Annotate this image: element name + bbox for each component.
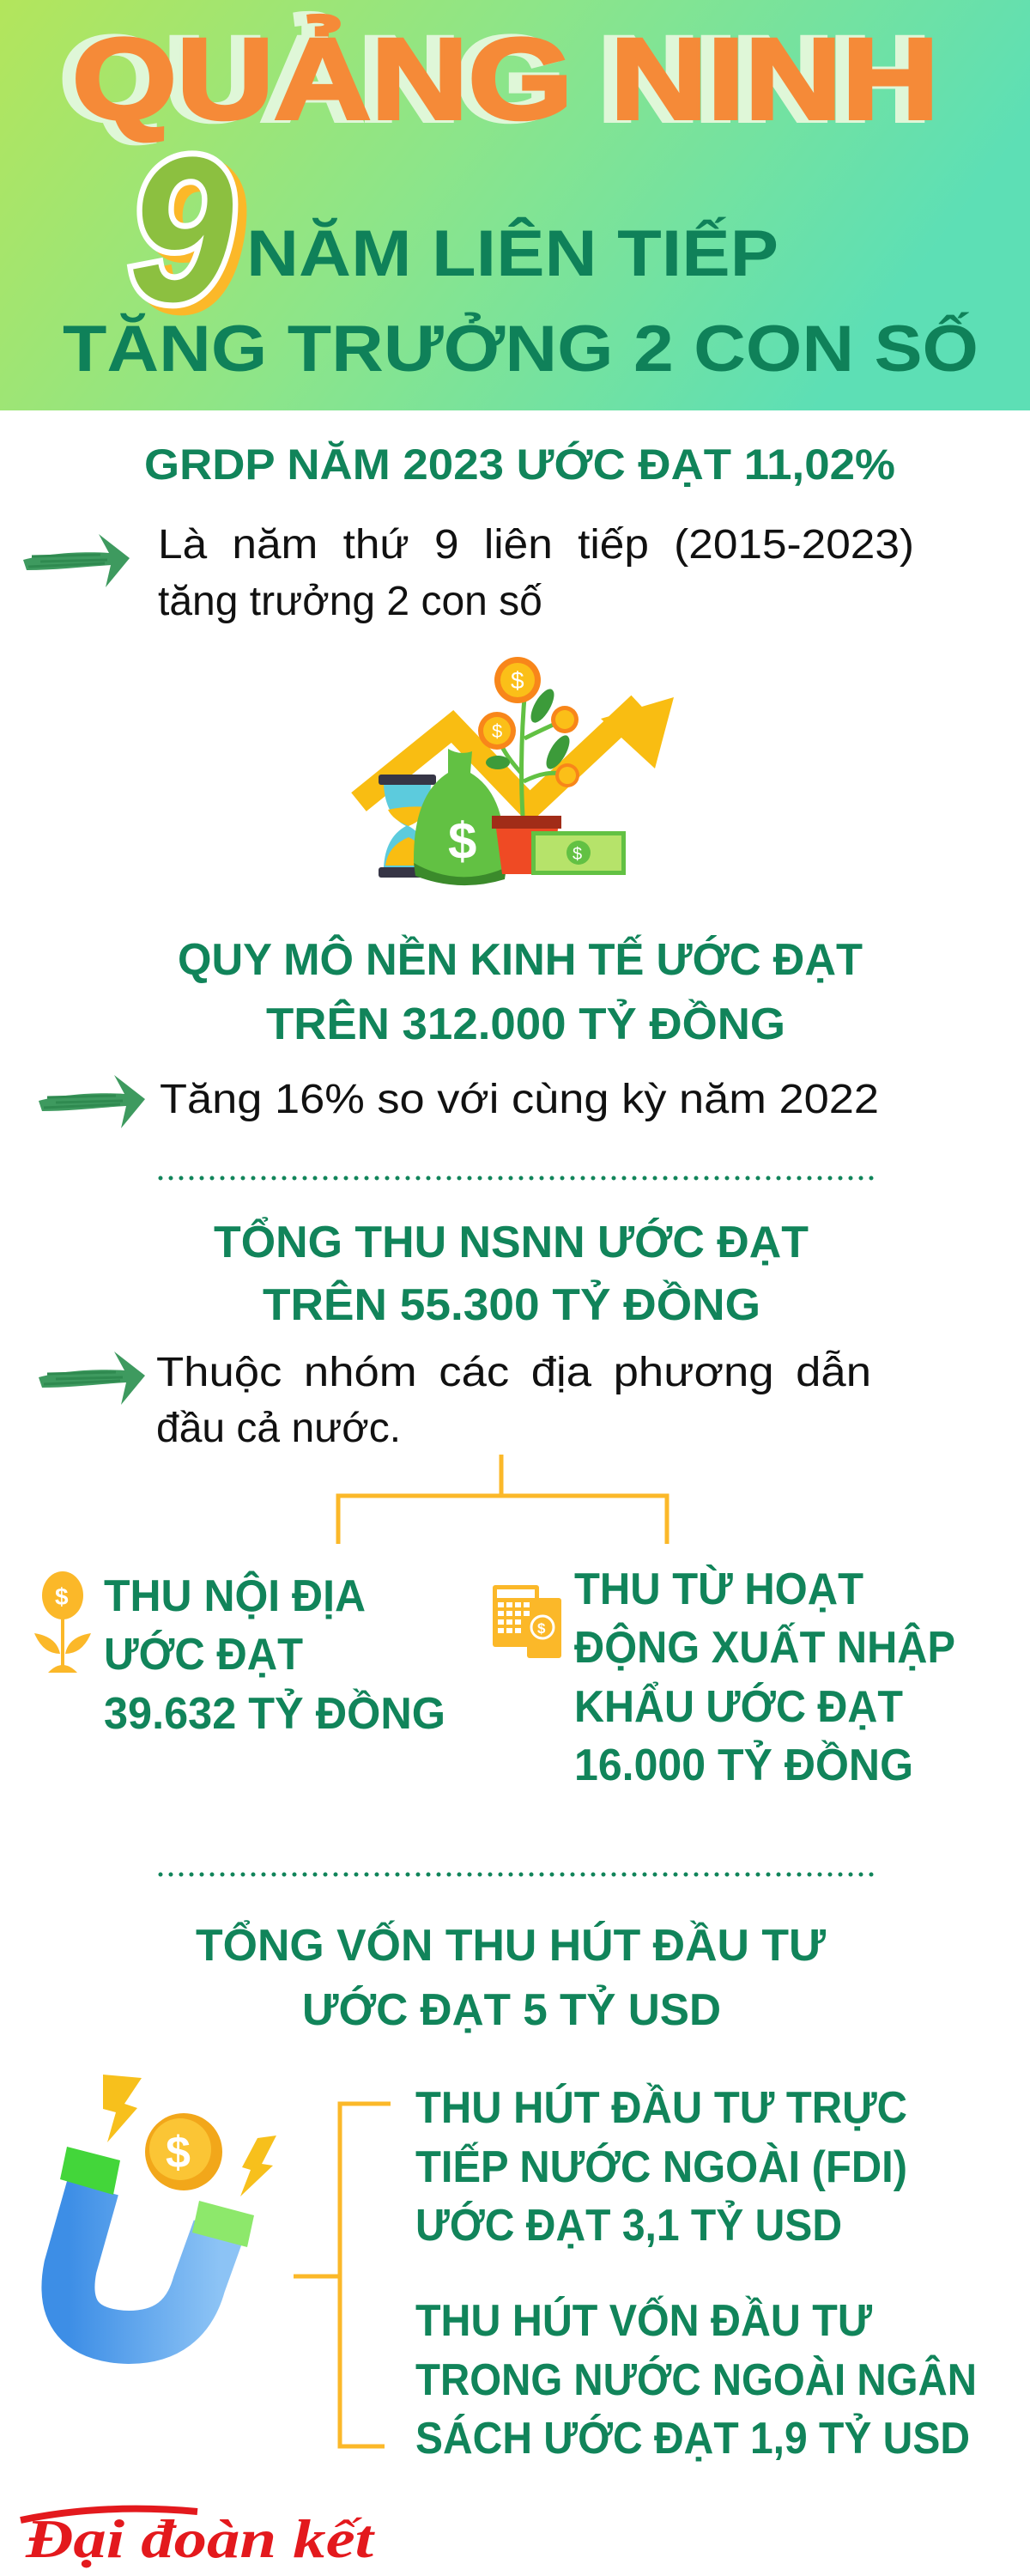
heading: NSNN: TỔNG THU NSNN ƯỚC ĐẠT <box>214 1217 809 1267</box>
plant <box>498 687 566 816</box>
illustration: growth <box>359 657 674 885</box>
logo: Đại đoàn kết: Đại đoàn kết <box>25 2508 376 2569</box>
icon: calculator: $ <box>537 1620 546 1637</box>
text: body 1: Là năm thứ 9 liên tiếp (2015-2023) <box>158 522 914 568</box>
text: body 2: Tăng 16% so với cùng kỳ năm 2022 <box>160 1077 879 1122</box>
item: xuất nhập khẩu <box>574 1564 955 1790</box>
bracket: split <box>338 1455 667 1544</box>
icon: arrow 2 <box>39 1075 145 1128</box>
illustration: growth: $ <box>448 812 476 870</box>
big number 9: 9 <box>129 114 233 344</box>
text: body 3 <box>156 1349 871 1451</box>
item: FDI: TIẾP NƯỚC NGOÀI (FDI) <box>415 2142 907 2192</box>
icon: magnet <box>60 2075 276 2337</box>
text: body 3: đầu cả nước. <box>156 1406 401 1451</box>
item: thu nội địa: ƯỚC ĐẠT <box>104 1630 303 1680</box>
header band <box>0 0 1030 410</box>
item: FDI: THU HÚT ĐẦU TƯ TRỰC <box>415 2082 907 2133</box>
icon: arrow 3 <box>39 1352 145 1405</box>
item: xuất nhập khẩu: 16.000 TỶ ĐỒNG <box>574 1740 913 1790</box>
subtitle line 2: TĂNG TRƯỞNG 2 CON SỐ <box>63 313 978 386</box>
item: thu nội địa <box>104 1571 445 1739</box>
heading: NSNN <box>214 1217 809 1330</box>
bracket: investments <box>294 2104 391 2446</box>
heading: quy mô: QUY MÔ NỀN KINH TẾ ƯỚC ĐẠT <box>178 934 863 985</box>
text: body 3: Thuộc nhóm các địa phương dẫn <box>156 1349 871 1395</box>
hourglass <box>379 775 436 785</box>
icon: money plant: $ <box>55 1583 69 1610</box>
item: xuất nhập khẩu: THU TỪ HOẠT <box>574 1564 863 1614</box>
heading: quy mô: TRÊN 312.000 TỶ ĐỒNG <box>266 999 785 1049</box>
item: domestic <box>415 2295 977 2464</box>
heading: vốn đầu tư: TỔNG VỐN THU HÚT ĐẦU TƯ <box>196 1920 827 1971</box>
item: xuất nhập khẩu: ĐỘNG XUẤT NHẬP <box>574 1622 955 1673</box>
heading: quy mô <box>178 934 863 1049</box>
big number 9: 9 <box>137 121 242 351</box>
illustration: growth: $ <box>511 667 524 694</box>
item: domestic: THU HÚT VỐN ĐẦU TƯ <box>415 2295 873 2346</box>
title: QUẢNG NINH: QUẢNG NINH <box>72 15 939 143</box>
item: FDI <box>415 2082 907 2251</box>
icon: calculator <box>493 1585 561 1658</box>
heading: GRDP: GRDP NĂM 2023 ƯỚC ĐẠT 11,02% <box>144 440 895 489</box>
icon: money plant <box>34 1571 91 1673</box>
bill <box>531 831 626 875</box>
subtitle line 1: NĂM LIÊN TIẾP <box>246 216 779 290</box>
illustration: growth: $ <box>573 845 582 864</box>
icon: magnet: $ <box>166 2128 191 2178</box>
pot <box>496 829 558 874</box>
heading: vốn đầu tư: ƯỚC ĐẠT 5 TỶ USD <box>302 1984 721 2035</box>
item: domestic: SÁCH ƯỚC ĐẠT 1,9 TỶ USD <box>415 2413 970 2464</box>
item: xuất nhập khẩu: KHẨU ƯỚC ĐẠT <box>574 1681 903 1732</box>
item: domestic: TRONG NƯỚC NGOÀI NGÂN <box>415 2354 977 2405</box>
icon: arrow 1 <box>23 534 130 587</box>
bag <box>414 749 505 883</box>
illustration: growth: $ <box>492 720 502 742</box>
text: body 1: tăng trưởng 2 con số <box>158 579 542 624</box>
item: thu nội địa: 39.632 TỶ ĐỒNG <box>104 1688 445 1739</box>
title: QUẢNG NINH: QUẢNG NINH <box>62 15 929 143</box>
heading: vốn đầu tư <box>196 1920 827 2035</box>
item: FDI: ƯỚC ĐẠT 3,1 TỶ USD <box>415 2200 842 2251</box>
item: thu nội địa: THU NỘI ĐỊA <box>104 1571 366 1621</box>
heading: NSNN: TRÊN 55.300 TỶ ĐỒNG <box>263 1279 760 1330</box>
text: body 1 <box>158 522 914 624</box>
